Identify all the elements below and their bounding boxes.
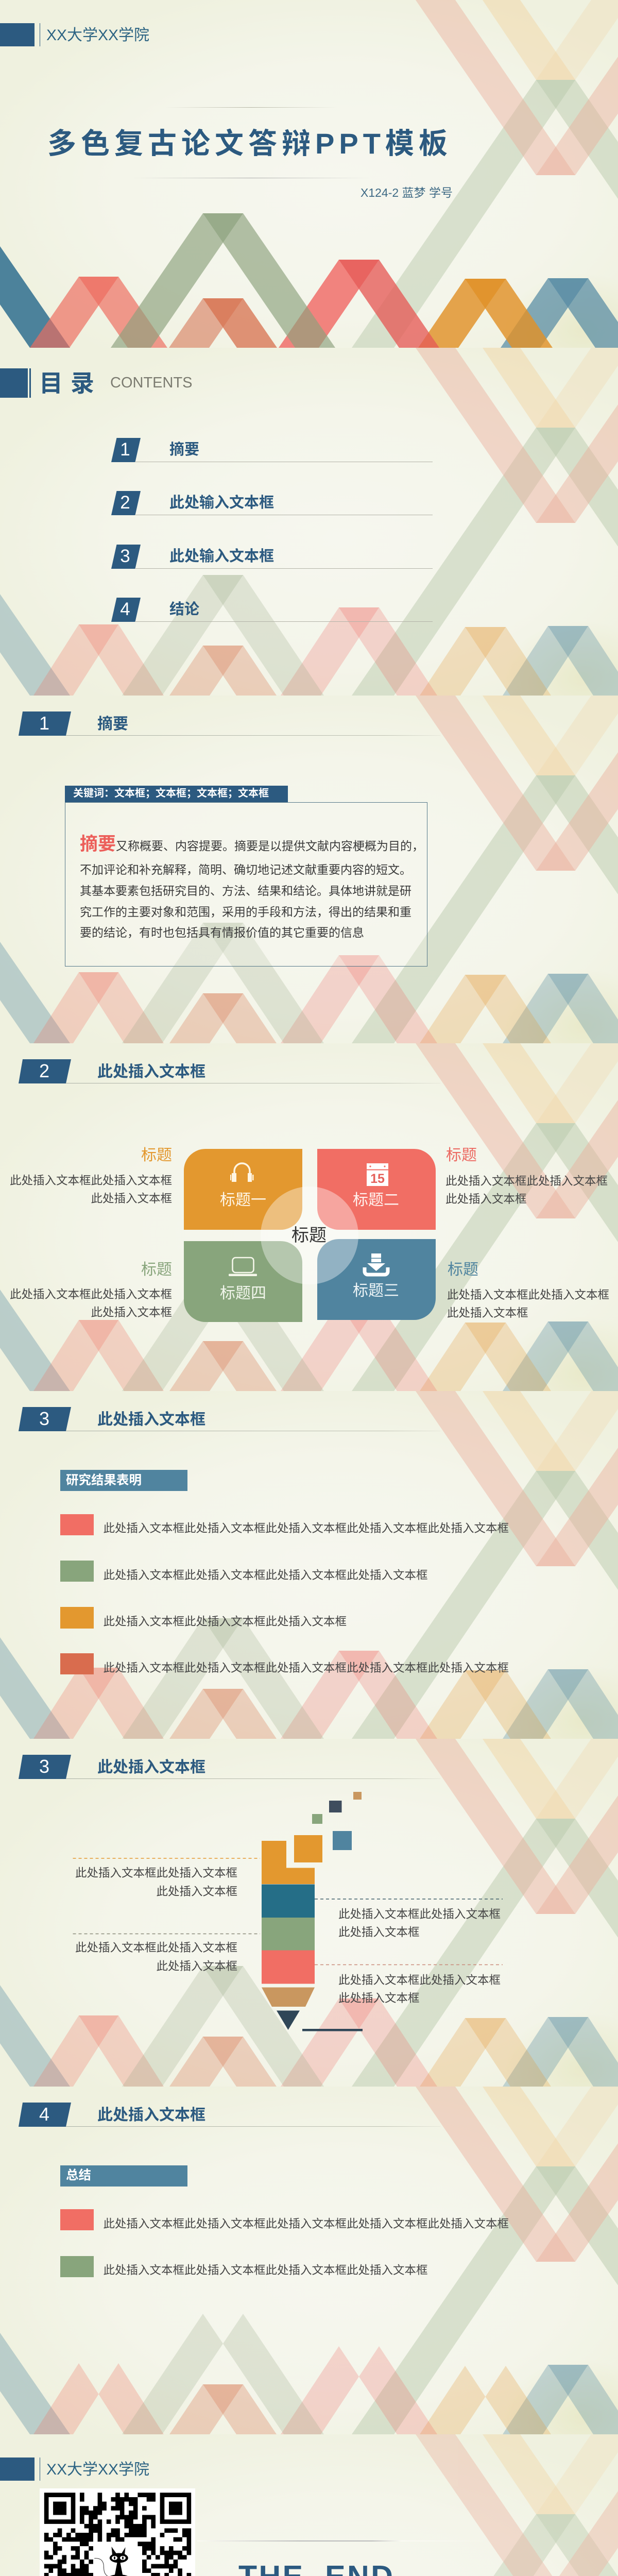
contents item 4: 4 [120, 599, 130, 619]
background: ribbons and coloured mountains [0, 0, 618, 348]
title rule top [165, 107, 337, 108]
text block: upper left: 此处插入文本框 [156, 1885, 237, 1898]
header block [0, 2458, 35, 2481]
text block: upper right: 此处插入文本框 [338, 1926, 420, 1939]
section number badge [19, 1407, 71, 1431]
panel: pencil slide [0, 1739, 618, 2087]
background: faded ribbons [0, 696, 618, 1043]
panel: contents slide [0, 348, 618, 696]
panel: abstract slide [0, 696, 618, 1043]
text block: top left: 此处插入文本框此处插入文本框 [10, 1174, 172, 1187]
abstract frame [65, 802, 427, 967]
contents item 2 [111, 491, 433, 515]
section number: 3 [39, 1408, 49, 1429]
section number: 1 [39, 713, 49, 734]
abstract line 1: 摘要又称概要、内容提要。摘要是以提供文献内容梗概为目的， [80, 834, 424, 854]
section number badge [19, 1059, 71, 1083]
text block: top left [10, 1147, 172, 1205]
text block: top right: 标题 [446, 1147, 477, 1164]
text block: top right [445, 1147, 608, 1206]
text block: bottom left: 此处插入文本框 [91, 1306, 172, 1319]
quadrant: green [184, 1241, 302, 1322]
text block: lower left: 此处插入文本框此处插入文本框 [75, 1941, 237, 1954]
school name: XX大学XX学院 [46, 2461, 149, 2478]
icon: laptop [229, 1257, 257, 1276]
text block: bottom right: 此处插入文本框此处插入文本框 [447, 1289, 609, 1301]
section number: 3 [39, 1756, 49, 1777]
contents item 4: 结论 [169, 601, 199, 618]
contents item 3: 此处输入文本框 [169, 548, 274, 565]
section rule [66, 2126, 440, 2127]
end rule top [197, 2540, 489, 2541]
result marker 3 [60, 1607, 94, 1629]
abstract line 3: 其基本要素包括研究目的、方法、结果和结论。具体地讲就是研 [80, 884, 411, 897]
summary text 2: 此处插入文本框此处插入文本框此处插入文本框此处插入文本框 [103, 2264, 428, 2277]
section number: 2 [39, 1060, 49, 1081]
panel: end slide [0, 2434, 618, 2576]
icon: calendar: 15 [370, 1172, 385, 1186]
heading: CONTENTS: CONTENTS [110, 375, 193, 391]
quadrant label two: 标题二 [353, 1192, 399, 1209]
abstract text [80, 834, 424, 939]
quadrant label one: 标题一 [220, 1192, 266, 1209]
school name [40, 23, 149, 46]
section title: 此处插入文本框 [97, 2107, 205, 2124]
text block: bottom left: 标题 [141, 1261, 172, 1278]
result marker 4 [60, 1653, 94, 1674]
keyword bar [65, 786, 288, 802]
result text 2: 此处插入文本框此处插入文本框此处插入文本框此处插入文本框 [103, 1569, 428, 1582]
quadrant label three: 标题三 [353, 1282, 399, 1299]
summary heading bar [60, 2165, 187, 2187]
results heading bar [60, 1470, 187, 1491]
quadrant label four: 标题四 [220, 1285, 266, 1302]
summary heading: 总结 [66, 2168, 91, 2182]
background: faded ribbons [0, 1391, 618, 1739]
summary marker 1 [60, 2209, 94, 2230]
abstract line 4: 究工作的主要对象和范围，采用的手段和方法，得出的结果和重 [80, 905, 411, 919]
text block: upper right [338, 1908, 501, 1939]
result marker 1 [60, 1514, 94, 1535]
background: faded ribbons [0, 348, 618, 696]
text block: lower left [75, 1941, 237, 1973]
header block [0, 23, 35, 46]
header block [0, 368, 28, 398]
panel: title slide [0, 0, 618, 348]
center label: 标题 [291, 1226, 327, 1245]
contents item 3 [111, 545, 433, 569]
QR code [39, 2488, 195, 2576]
background: ribbons and coloured mountains [0, 2434, 618, 2576]
keywords: 关键词：文本框；文本框；文本框；文本框 [73, 788, 269, 799]
text block: bottom right [447, 1261, 609, 1319]
text block: bottom left [10, 1261, 172, 1319]
result text 3: 此处插入文本框此处插入文本框此处插入文本框 [103, 1615, 347, 1628]
text block: bottom right: 标题 [448, 1261, 478, 1278]
section rule [66, 735, 440, 736]
center circle [261, 1187, 358, 1284]
contents item 3: 3 [120, 546, 130, 566]
text block: upper left [75, 1867, 237, 1898]
section number badge [19, 711, 71, 736]
text block: bottom left: 此处插入文本框此处插入文本框 [10, 1288, 172, 1301]
background: faded ribbons [0, 1043, 618, 1391]
icon: download [363, 1253, 389, 1277]
text block: top right: 此处插入文本框此处插入文本框 [445, 1175, 608, 1188]
contents item 1: 1 [120, 439, 130, 460]
school name [40, 2458, 149, 2481]
section title: 此处插入文本框 [97, 1063, 205, 1080]
panel: summary slide [0, 2087, 618, 2434]
text block: lower right [338, 1974, 501, 2005]
pencil diagram [73, 1792, 503, 2031]
text block: top right: 此处插入文本框 [445, 1193, 527, 1206]
abstract line 2: 不加评论和补充解释，简明、确切地记述文献重要内容的短文。 [80, 863, 411, 876]
abstract line 5: 要的结论，有时也包括具有情报价值的其它重要的信息 [80, 926, 364, 939]
background: faded ribbons [0, 1739, 618, 2087]
section number badge [19, 2103, 71, 2127]
icon: calendar [367, 1163, 388, 1186]
panel: four-quadrant slide [0, 1043, 618, 1391]
header divider [29, 368, 31, 398]
panel: research results slide [0, 1391, 618, 1739]
text block: top left: 标题 [141, 1147, 172, 1164]
quadrant: blue [317, 1239, 436, 1320]
heading: 目录: 目录 [39, 370, 102, 397]
section number: 4 [39, 2104, 49, 2125]
text block: upper right: 此处插入文本框此处插入文本框 [338, 1908, 501, 1921]
text block: lower left: 此处插入文本框 [156, 1960, 237, 1973]
section title: 此处插入文本框 [97, 1759, 205, 1776]
text block: top left: 此处插入文本框 [91, 1192, 172, 1205]
school name: XX大学XX学院 [46, 27, 149, 44]
contents item 1: 摘要 [169, 442, 199, 458]
icon: headphones [230, 1162, 253, 1182]
text block: bottom right: 此处插入文本框 [447, 1307, 528, 1319]
text block: upper left: 此处插入文本框此处插入文本框 [75, 1867, 237, 1879]
section rule [66, 1778, 440, 1779]
results heading: 研究结果表明 [66, 1473, 142, 1487]
contents item 2: 此处输入文本框 [169, 495, 274, 511]
result marker 2 [60, 1561, 94, 1582]
main title: 多色复古论文答辩PPT模板 [47, 127, 452, 160]
section title: 此处插入文本框 [97, 1411, 205, 1428]
contents item 4 [111, 598, 433, 622]
summary text 1: 此处插入文本框此处插入文本框此处插入文本框此处插入文本框此处插入文本框 [103, 2217, 509, 2230]
quadrant: orange [184, 1149, 302, 1229]
contents item 1 [111, 438, 433, 462]
text block: lower right: 此处插入文本框 [338, 1992, 420, 2005]
author line: X124-2 蓝梦 学号 [360, 186, 453, 199]
summary marker 2 [60, 2256, 94, 2277]
background: faded ribbons with pointed peaks [0, 2087, 618, 2434]
section number badge [19, 1755, 71, 1779]
quadrant: red [317, 1149, 436, 1229]
result text 1: 此处插入文本框此处插入文本框此处插入文本框此处插入文本框此处插入文本框 [103, 1522, 509, 1535]
contents item 2: 2 [120, 493, 130, 513]
result text 4: 此处插入文本框此处插入文本框此处插入文本框此处插入文本框此处插入文本框 [103, 1662, 509, 1674]
section title: 摘要 [97, 716, 128, 733]
text block: lower right: 此处插入文本框此处插入文本框 [338, 1974, 501, 1987]
